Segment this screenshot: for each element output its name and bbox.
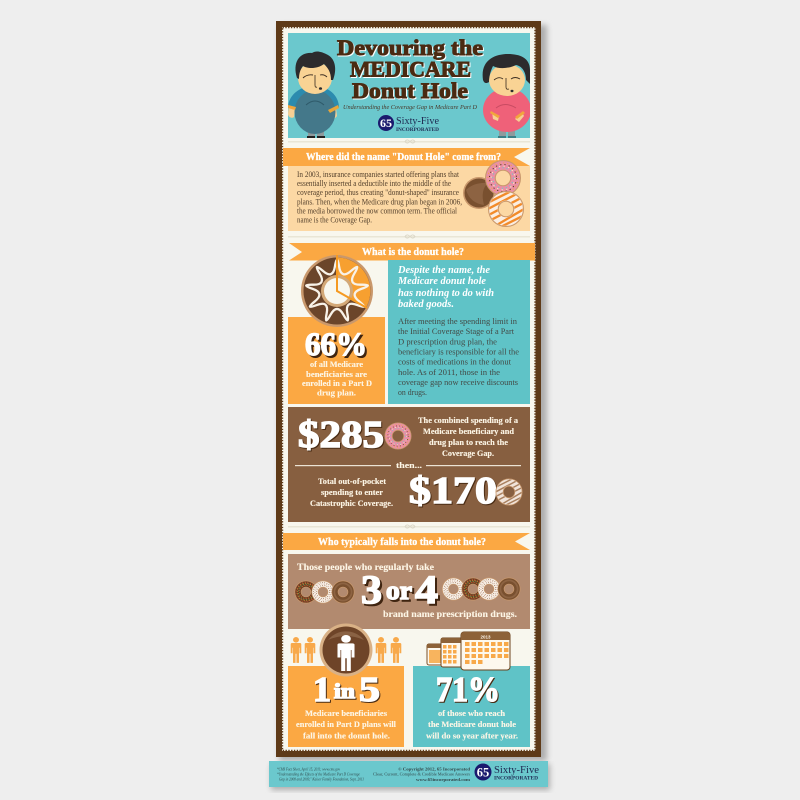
text: out-of-pocket: Catastrophic Coverage. [310,499,393,508]
illustration: sad woman [483,54,531,138]
text: out-of-pocket: Total out-of-pocket [318,477,386,486]
footnotes [277,766,364,782]
banner heading: what is the donut hole [289,243,535,260]
statistic: 3 or 4: 3 [361,567,382,612]
text: those people: Those people who regularly take [297,563,434,573]
caption: of those who reach [438,709,505,718]
body text: hole. As of 2011, those in the [398,367,500,377]
text block: the media borrowed the now common term. The official [297,205,458,215]
body text: the Initial Coverage Stage of a Part [398,326,515,336]
lead text: Medicare donut hole [397,276,486,287]
lead text: baked goods. [398,299,454,310]
text: out-of-pocket [310,477,393,508]
caption: fall into the donut hole. [303,732,390,740]
text: brand name drugs: brand name prescription drugs. [383,610,517,620]
title [336,39,484,100]
poster frame [276,21,541,757]
lead text: has nothing to do with [398,288,494,299]
text block: In 2003, insurance companies started offering plans that [297,169,460,179]
caption: Medicare beneficiaries [305,709,388,718]
text: combined spending: The combined spending of a [418,416,519,425]
panel: 3 or 4 drugs [288,554,530,629]
panel: explanation [388,260,530,404]
lead text: Despite the name, the [397,265,490,276]
banner heading: what is the donut hole: What is the donut hole? [362,247,464,258]
banner heading: who typically falls [283,533,530,550]
copyright: Clear, Current, Complete & Credible Medicare Answers [373,772,470,778]
statistic: 3 or 4: or [386,576,412,605]
statistic: 1 in 5: 1 [313,670,331,709]
caption: will do so year after year. [426,732,518,740]
copyright: www.65incorporated.com [416,777,470,782]
footnotes: *CMS Fact Sheet, April 15, 2011; www.cms.gov [277,766,340,772]
header panel [288,33,531,138]
text: combined spending: drug plan to reach the [429,438,508,447]
banner heading [283,148,530,166]
caption: drug plan. [317,388,356,398]
statistic: $170: $170 [409,470,497,512]
caption: of all Medicare [310,360,363,369]
statistic: 66%: 66% [305,327,367,363]
icon: striped donut [496,478,522,506]
statistic: 71%: 71% [436,670,500,709]
caption [296,709,397,740]
text block: coverage period, thus creating "donut-shaped" insurance [297,187,459,197]
logo: Sixty-Five Incorporated: Sixty-Five [396,116,439,127]
statistic: $285: $285 [298,414,384,456]
title: Donut Hole [352,78,468,103]
body text: beneficiary is responsible for all the [398,346,519,356]
icon: three donuts [296,582,352,602]
illustration: sad man [288,51,339,138]
logo: Sixty-Five Incorporated [474,764,539,782]
lead text [397,265,494,310]
icon: calendars: 2013 [480,634,491,640]
panel: 66 percent [288,255,385,404]
logo: Sixty-Five Incorporated: INCORPORATED [396,128,439,133]
statistic: 3 or 4: 4 [415,567,438,612]
text: combined spending: Medicare beneficiary and [423,427,514,436]
footnotes: *Understanding the Effects of the Medicare Part D Coverage [277,772,360,776]
icon: four donuts [444,579,518,599]
text block: name is the Coverage Gap. [297,214,372,224]
logo: Sixty-Five Incorporated: INCORPORATED [494,776,538,782]
icon: person in donut [320,624,372,676]
body text: D prescription drug plan, the [398,336,497,346]
banner heading: who typically falls: Who typically falls into the donut hole? [318,537,486,548]
text: out-of-pocket: spending to enter [321,488,383,497]
caption: beneficiaries are [306,370,367,379]
caption: the Medicare donut hole [428,720,516,729]
statistic: 3 or 4 [361,567,438,612]
icon: three donuts [463,163,524,227]
icon: sprinkle donut [387,425,409,447]
body text: on drugs. [398,387,427,397]
caption [302,360,372,398]
footer shadow [271,764,550,790]
body text: costs of medications in the donut [398,356,512,366]
title: Devouring the [337,35,483,60]
panel: where did the name come from [283,148,530,231]
statistic: 1 in 5: 5 [359,670,380,709]
logo: Sixty-Five Incorporated [378,115,439,131]
body text: After meeting the spending limit in [398,316,518,326]
icon: row of people [291,637,401,663]
footer strip [269,761,548,787]
footnotes: Gap in 2008 and 2009," Kaiser Family Foundation, Sept. 2011 [279,776,364,782]
caption [426,709,518,740]
title: MEDICARE [350,56,471,82]
caption: enrolled in Part D plans will [296,720,397,729]
text: combined spending: Coverage Gap. [442,449,494,458]
copyright [373,766,470,782]
body text [398,316,519,397]
divider ornaments [288,140,530,528]
icon: big donut with wedge [301,255,373,327]
poster shadow [279,25,547,761]
statistic: 1 in 5 [313,670,380,709]
text block: essentially inserted a deductible into the middle of the [297,178,451,188]
panel: 1 in 5 [288,624,404,747]
logo: Sixty-Five Incorporated: 65 [477,766,489,780]
text: combined spending [418,416,519,458]
logo: Sixty-Five Incorporated: 65 [380,116,392,130]
logo: Sixty-Five Incorporated: Sixty-Five [494,764,539,776]
subtitle: Understanding the Coverage Gap in Medicare Part D [343,104,478,111]
statistic: 1 in 5: in [334,679,355,703]
text block [297,169,462,224]
banner heading: Where did the name "Donut Hole" come from? [306,152,501,163]
caption: enrolled in a Part D [302,379,372,388]
panel: 71 percent [413,632,530,747]
then separator: then... [396,461,422,470]
text block: plans. Then, when the Medicare drug plan began in 2006, [297,196,462,206]
panel: spending figures [288,407,530,522]
body text: coverage gap now receive discounts [398,377,519,387]
copyright: © Copyright 2012, 65 Incorporated [398,766,470,772]
